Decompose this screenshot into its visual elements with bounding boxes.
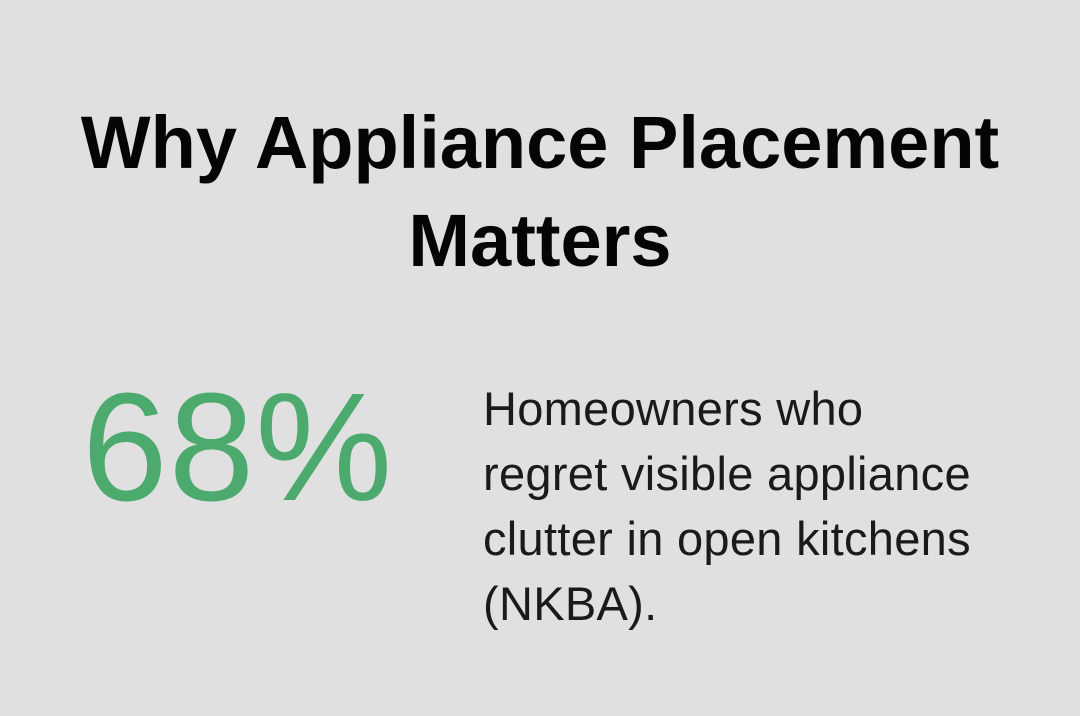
description text	[483, 382, 971, 630]
description text: clutter in open kitchens	[483, 512, 971, 565]
title: Why Appliance Placement	[81, 101, 999, 184]
description text: Homeowners who	[483, 382, 863, 435]
description text: regret visible appliance	[483, 447, 971, 500]
title: Matters	[408, 199, 672, 282]
stat: 68%: 68%	[82, 361, 393, 533]
title	[80, 101, 999, 282]
description text: (NKBA).	[483, 577, 657, 630]
